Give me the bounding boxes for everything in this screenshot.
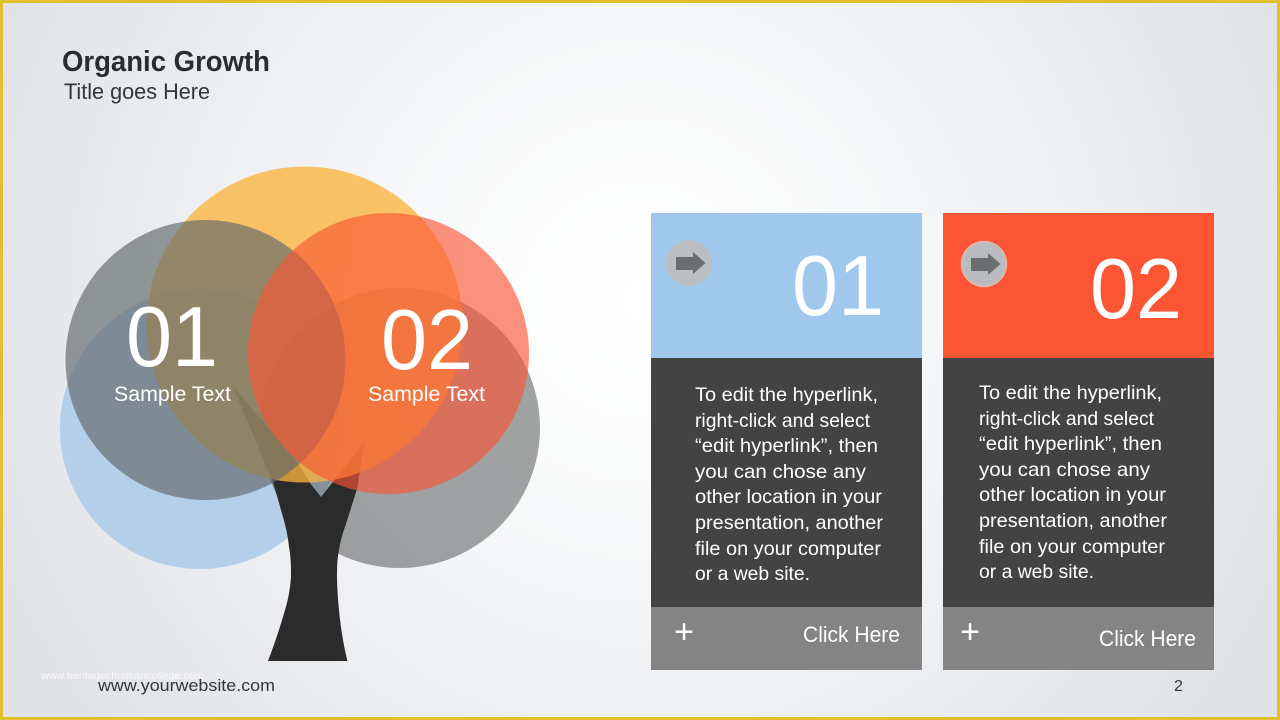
card 02 footer <box>943 607 1214 670</box>
icon: arrow button 2 <box>962 242 1006 286</box>
label: sample text 2: Sample Text <box>368 383 485 406</box>
title: Organic Growth <box>62 46 270 78</box>
card 01 header <box>651 213 922 358</box>
canopy circle: yellow <box>146 166 462 482</box>
card 02 text: To edit the hyperlink, <box>979 382 1162 404</box>
canopy circle: left gray <box>66 220 346 500</box>
link: click here 1: Click Here <box>803 622 900 647</box>
canopy circle: red <box>248 213 529 494</box>
card 02 text: “edit hyperlink”, then <box>979 433 1162 455</box>
heading block <box>62 46 270 104</box>
tree trunk <box>232 385 364 661</box>
card 02 text: presentation, another <box>979 510 1168 532</box>
card 01 text: you can chose any <box>695 461 866 483</box>
card 01 text: right-click and select <box>695 410 871 432</box>
card 01 text: presentation, another <box>695 512 884 534</box>
number 01: 01 <box>126 290 218 385</box>
card 01 text: other location in your <box>695 486 883 508</box>
card 01 text <box>695 384 884 585</box>
card 01 text: or a web site. <box>695 563 810 585</box>
card 01 number: 01 <box>792 239 884 334</box>
canopy circle: right gray <box>260 288 540 568</box>
panel: card 01 <box>651 213 922 670</box>
label: sample text 1: Sample Text <box>114 383 231 406</box>
canopy circle: blue <box>60 289 340 569</box>
card 02 text <box>979 382 1168 583</box>
card 01 body <box>651 358 922 607</box>
card 02 text: right-click and select <box>979 408 1155 430</box>
card 02 text: other location in your <box>979 484 1167 506</box>
tree diagram <box>60 166 540 661</box>
card 01 footer <box>651 607 922 670</box>
footer website: www.yourwebsite.com <box>97 676 275 695</box>
link: click here 2: Click Here <box>1099 626 1196 651</box>
card 02 text: file on your computer <box>979 536 1166 558</box>
card 01 text: To edit the hyperlink, <box>695 384 878 406</box>
panel: card 02 <box>943 213 1214 670</box>
card 02 body <box>943 358 1214 607</box>
card 02 header <box>943 213 1214 358</box>
number 02: 02 <box>381 293 473 388</box>
faint watermark: www.heritagechristiancollege.com <box>40 671 204 682</box>
page number: 2 <box>1174 678 1183 695</box>
icon: plus 2: + <box>960 613 980 651</box>
card 01 text: “edit hyperlink”, then <box>695 435 878 457</box>
subtitle: Title goes Here <box>64 79 210 104</box>
card 02 text: you can chose any <box>979 459 1150 481</box>
icon: plus 1: + <box>674 613 694 651</box>
card 02 number: 02 <box>1090 242 1182 337</box>
card 01 text: file on your computer <box>695 538 882 560</box>
card 02 text: or a web site. <box>979 561 1094 583</box>
icon: arrow button 1 <box>666 240 712 286</box>
